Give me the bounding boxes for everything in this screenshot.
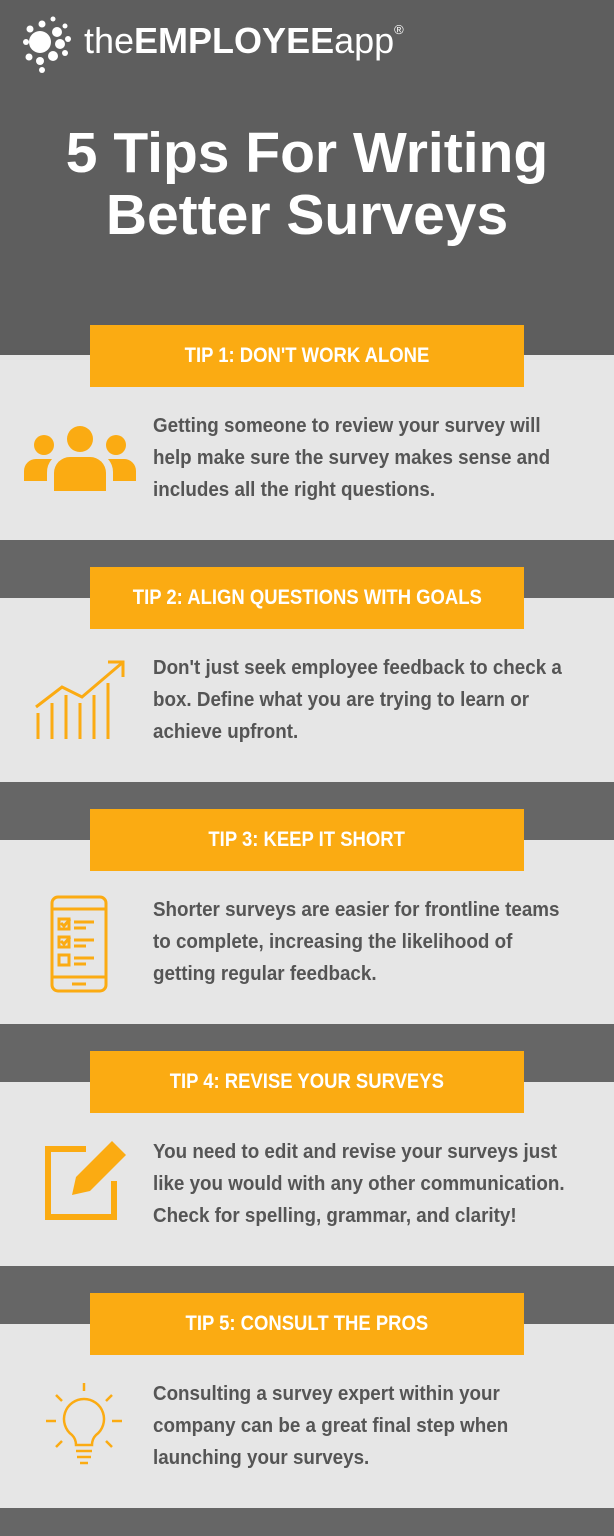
tip 5 text: launching your surveys. [153, 1447, 369, 1469]
icon: edit [45, 1141, 126, 1220]
tip 5 heading: TIP 5: CONSULT THE PROS [186, 1312, 428, 1335]
tip 4 heading [90, 1051, 524, 1113]
panel: tip 3 [50, 809, 559, 992]
tip 5 text: company can be a great final step when [153, 1415, 508, 1437]
tip 1 text: help make sure the survey makes sense and [153, 447, 550, 469]
tip 4 text [153, 1141, 565, 1227]
panel: tip 2 [35, 567, 562, 743]
panel: tip 1 [24, 325, 550, 501]
tip 4 text: You need to edit and revise your surveys just [153, 1141, 557, 1163]
title: Better Surveys [106, 183, 508, 247]
tip 1 text: Getting someone to review your survey will [153, 415, 541, 437]
header background [0, 0, 614, 355]
tip 2 heading: TIP 2: ALIGN QUESTIONS WITH GOALS [132, 586, 482, 609]
icon: growth chart [35, 660, 124, 739]
tip 1 heading [90, 325, 524, 387]
logo: theEMPLOYEEapp® [84, 20, 404, 61]
tip 3 text [153, 899, 559, 985]
title [66, 121, 548, 247]
tip 2 text [153, 657, 562, 743]
tip 3 heading [90, 809, 524, 871]
logo [23, 16, 404, 73]
tip 2 text: achieve upfront. [153, 721, 298, 743]
tip 4 text: Check for spelling, grammar, and clarity! [153, 1205, 517, 1227]
icon: people [24, 426, 136, 491]
tip 2 text: box. Define what you are trying to learn or [153, 689, 529, 711]
tip 3 heading: TIP 3: KEEP IT SHORT [209, 828, 405, 851]
tip 3 text: to complete, increasing the likelihood of [153, 931, 512, 953]
panel: tip 5 [46, 1293, 524, 1469]
tip 1 text: includes all the right questions. [153, 479, 435, 501]
title: 5 Tips For Writing [66, 121, 548, 185]
tip 2 text: Don't just seek employee feedback to check a [153, 657, 562, 679]
tip 1 text [153, 415, 550, 501]
tip 4 text: like you would with any other communication. [153, 1173, 565, 1195]
icon: phone checklist [50, 896, 108, 992]
tip 4 heading: TIP 4: REVISE YOUR SURVEYS [170, 1070, 444, 1093]
tip 3 text: Shorter surveys are easier for frontline teams [153, 899, 559, 921]
tip 2 heading [90, 567, 524, 629]
dark bands [0, 540, 614, 598]
tip 5 text [153, 1383, 508, 1469]
panel: tip 4 [45, 1051, 565, 1227]
icon: lightbulb [46, 1383, 122, 1464]
tip 5 heading [90, 1293, 524, 1355]
tip 5 text: Consulting a survey expert within your [153, 1383, 500, 1405]
tip 3 text: getting regular feedback. [153, 963, 377, 985]
tip 1 heading: TIP 1: DON'T WORK ALONE [185, 344, 429, 367]
